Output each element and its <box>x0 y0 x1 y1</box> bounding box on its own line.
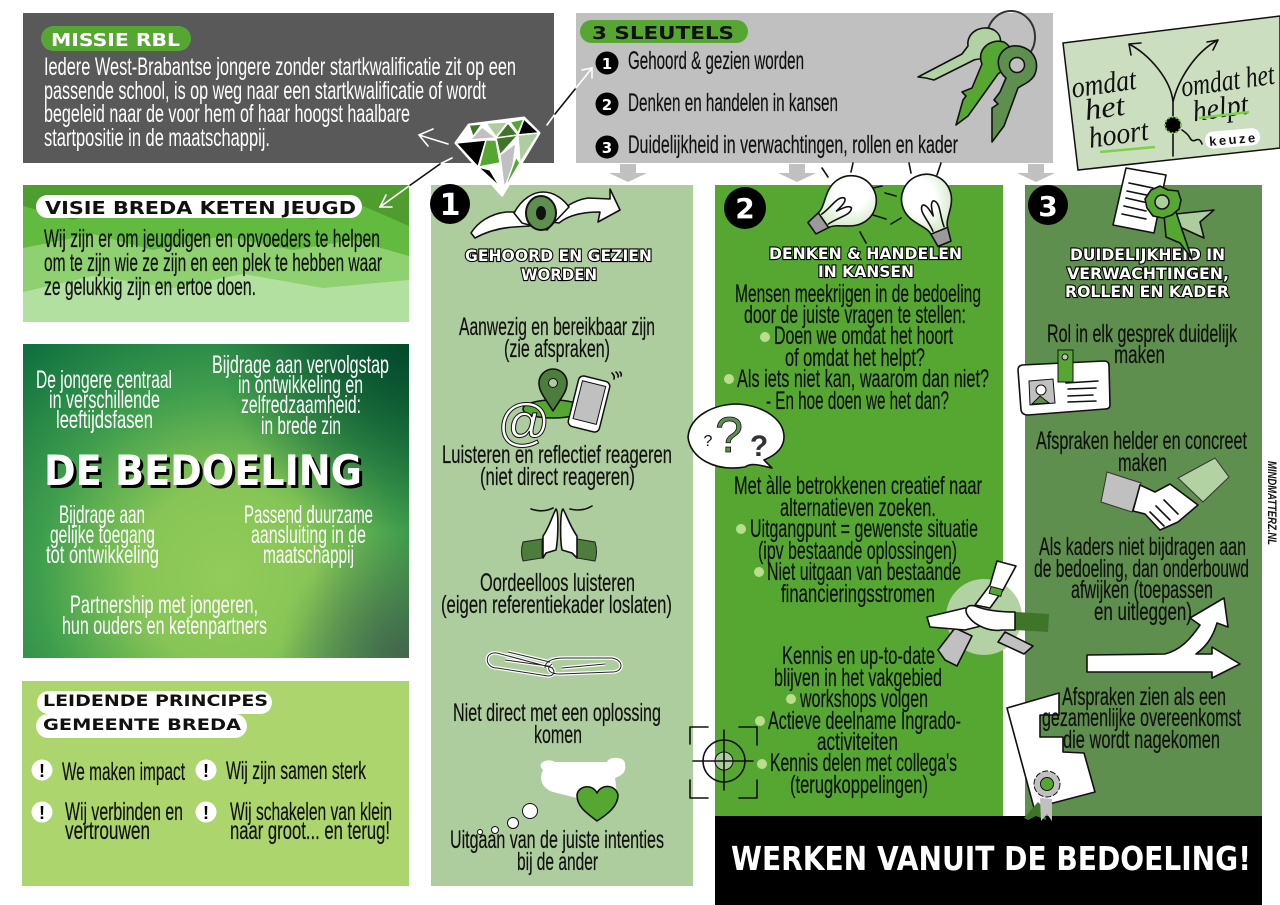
text: passend duurzame: Passend duurzame <box>244 501 373 529</box>
icon: speech bubble with question marks: ? <box>750 430 768 463</box>
text: creatief alternatieven: Niet uitgaan van bestaande <box>767 558 961 586</box>
badge: 1: 1 <box>440 188 460 223</box>
text: kennis up-to-date: workshops volgen <box>799 685 928 713</box>
icon: location, phone, at sign: @ <box>498 394 550 452</box>
heading pill: 3 sleutels: 3 SLEUTELS <box>592 23 734 44</box>
badge: 2 <box>724 187 766 229</box>
text: afspraken helder: maken <box>1118 449 1167 477</box>
panel: 3 sleutels <box>576 11 1053 163</box>
list: sleutels: 3 <box>602 139 612 157</box>
text: niet direct met een oplossing <box>453 699 661 749</box>
text: bijdrage aan vervolgstap: zelfredzaamheid: <box>241 391 361 419</box>
icon: id badge <box>1018 350 1110 415</box>
heading pills: leidende principes <box>36 691 272 738</box>
arrows: grey down arrows <box>609 164 1055 182</box>
text: visie <box>44 225 382 301</box>
icon: target <box>690 727 757 798</box>
badge: 1 <box>430 184 470 224</box>
text: partnership: hun ouders en ketenpartners <box>62 612 267 640</box>
text: de jongere centraal: in verschillende <box>49 386 160 414</box>
text: creatief alternatieven: Met àlle betrokkenen creatief naar <box>734 472 982 500</box>
banner: werken vanuit de bedoeling <box>715 816 1262 905</box>
badge: 3: 3 <box>1038 190 1058 223</box>
icon: certificate <box>1007 693 1095 808</box>
text: aanwezig: Aanwezig en bereikbaar zijn <box>459 313 655 341</box>
heading: duidelijkheid in verwachtingen <box>1065 245 1229 301</box>
text: gelijke toegang <box>46 501 159 569</box>
icon: closed eyes and hands <box>522 506 596 561</box>
text: visie: Wij zijn er om jeugdigen en opvoeders te helpen <box>44 225 380 253</box>
text: visie: ze gelukkig zijn en ertoe doen. <box>44 273 256 301</box>
list: principes: Wij schakelen van klein <box>230 798 392 826</box>
text: oordeelloos: (eigen referentiekader loslaten) <box>441 591 672 619</box>
text: kennis up-to-date <box>755 642 961 799</box>
arrow: diamond to missie <box>419 129 448 146</box>
heading: duidelijkheid in verwachtingen: ROLLEN EN KADER <box>1065 282 1229 301</box>
text: mensen meekrijgen: Doen we omdat het hoort <box>774 322 953 350</box>
text: bijdrage aan vervolgstap: Bijdrage aan vervolgstap <box>212 351 389 379</box>
text: mensen meekrijgen: Als iets niet kan, waarom dan niet? <box>737 365 989 393</box>
credit: mindmatterz.nl: MINDMATTERZ.NL <box>1265 461 1279 545</box>
text: mensen meekrijgen: - En hoe doen we het dan? <box>766 387 949 415</box>
text: gelijke toegang: gelijke toegang <box>50 521 155 549</box>
heading pill: 3 sleutels <box>580 20 748 44</box>
arrow: diamond to sleutels <box>547 68 592 125</box>
text: aanwezig <box>459 313 655 363</box>
heading pill: missie RBL <box>41 26 191 51</box>
text: partnership: Partnership met jongeren, <box>70 591 258 619</box>
text: kennis up-to-date: (terugkoppelingen) <box>790 771 928 799</box>
icon: joined hands <box>927 561 1049 666</box>
illustration card: omdat het hoort of helpt <box>1063 16 1280 170</box>
list: principes: We maken impact <box>62 758 185 786</box>
handwritten text: omdat het helpt <box>1179 58 1280 129</box>
heading: denken en handelen in kansen <box>769 244 962 281</box>
text: afspraken zien <box>1042 683 1241 754</box>
list: principes: Wij verbinden en <box>65 798 183 826</box>
handwritten text: omdat het helpt: helpt <box>1190 88 1251 128</box>
text: juiste intenties: Uitgaan van de juiste intenties <box>450 826 664 854</box>
handwritten text: omdat het hoort: omdat <box>1069 63 1139 105</box>
text: mensen meekrijgen: Mensen meekrijgen in de bedoeling <box>735 280 981 308</box>
heading: duidelijkheid in verwachtingen: DUIDELIJKHEID IN <box>1070 245 1225 264</box>
heading: duidelijkheid in verwachtingen: VERWACHTINGEN, <box>1067 264 1229 283</box>
handwritten text: omdat het hoort: hoort <box>1086 114 1151 155</box>
badge: 2: 2 <box>735 192 755 225</box>
text: missie: Iedere West-Brabantse jongere zonder startkwalificatie zit op een <box>44 53 516 81</box>
heading: denken en handelen in kansen: DENKEN & HANDELEN <box>769 244 962 263</box>
text: gelijke toegang: tot ontwikkeling <box>46 541 159 569</box>
text: juiste intenties <box>450 826 664 876</box>
list: sleutels: Gehoord & gezien worden <box>628 47 804 75</box>
text: mensen meekrijgen: door de juiste vragen te stellen: <box>744 301 966 329</box>
icon: speech bubble with question marks: ? <box>715 407 743 463</box>
text: niet direct met een oplossing: Niet direct met een oplossing <box>453 699 661 727</box>
panel: de bedoeling <box>23 344 409 658</box>
icon: location, phone, at sign <box>498 369 621 452</box>
text: kennis up-to-date: Kennis delen met collega's <box>770 749 957 777</box>
heading: gehoord en gezien worden <box>465 246 652 284</box>
text: missie: begeleid naar de voor hem of haar hoogst haalbare <box>44 100 410 128</box>
heading: de bedoeling: DE BEDOELING <box>44 446 362 495</box>
arrow: diamond to visie <box>380 158 452 207</box>
text: afspraken helder <box>1036 427 1247 477</box>
text: kennis up-to-date: Actieve deelname Ingrado- <box>768 707 961 735</box>
list: principes: ! <box>203 803 209 823</box>
icon: keys <box>918 11 1037 142</box>
text: missie: startpositie in de maatschappij. <box>44 124 270 152</box>
text: bijdrage aan vervolgstap: in brede zin <box>261 412 341 440</box>
handwritten text: omdat het hoort <box>1069 62 1151 156</box>
text: visie: om te zijn wie ze zijn en een plek te hebben waar <box>44 249 382 277</box>
heading: denken en handelen in kansen: IN KANSEN <box>818 262 914 281</box>
text: als kaders <box>1034 533 1249 626</box>
text: aanwezig: (zie afspraken) <box>504 335 610 363</box>
icon: paperclips <box>487 652 621 676</box>
text: creatief alternatieven: alternatieven zoeken. <box>780 494 936 522</box>
list: sleutels: 1 <box>602 55 612 73</box>
text: partnership <box>62 591 267 640</box>
label: keuze: keuze <box>1209 130 1256 149</box>
text: oordeelloos <box>441 569 672 619</box>
icon: handshake <box>1101 458 1229 530</box>
text: creatief alternatieven <box>734 472 982 608</box>
icon: branching arrow <box>1087 598 1240 678</box>
text: bijdrage aan vervolgstap <box>212 351 389 440</box>
text: bijdrage aan vervolgstap: in ontwikkeling en <box>238 371 363 399</box>
icon: eye with arrows <box>471 189 620 238</box>
text: kennis up-to-date: activiteiten <box>817 728 898 756</box>
text: de jongere centraal <box>36 366 172 434</box>
text: niet direct met een oplossing: komen <box>534 721 582 749</box>
heading: gehoord en gezien worden: GEHOORD EN GEZIEN <box>465 246 652 265</box>
text: creatief alternatieven: Uitgangpunt = gewenste situatie <box>750 515 978 543</box>
panel: leidende principes <box>22 681 409 886</box>
list: principes <box>32 757 392 845</box>
text: creatief alternatieven: (ipv bestaande oplossingen) <box>758 537 957 565</box>
text: passend duurzame: maatschappij <box>263 541 354 569</box>
icon: diamond <box>456 118 539 195</box>
text: mensen meekrijgen: of omdat het helpt? <box>785 344 925 372</box>
panel: missie RBL <box>23 13 554 163</box>
text: passend duurzame <box>244 501 373 569</box>
heading pill: visie: VISIE BREDA KETEN JEUGD <box>45 198 356 219</box>
icon: light bulbs <box>798 163 968 253</box>
text: mensen meekrijgen <box>724 280 989 415</box>
icon: thought cloud with heart <box>478 758 625 834</box>
icon: certificate with rosette <box>1113 168 1214 259</box>
list: principes: Wij zijn samen sterk <box>226 757 366 785</box>
text: luisteren: Luisteren en reflectief reageren <box>442 441 672 469</box>
icon: speech bubble with question marks <box>688 404 784 468</box>
list: sleutels: Denken en handelen in kansen <box>628 89 838 117</box>
icon: speech bubble with question marks: ? <box>704 433 713 450</box>
heading pills: leidende principes: LEIDENDE PRINCIPES <box>43 691 268 710</box>
text: missie <box>44 53 516 152</box>
list: principes: ! <box>39 803 45 823</box>
panel: visie Breda keten jeugd <box>23 185 409 322</box>
heading pill: missie RBL: MISSIE RBL <box>51 30 180 51</box>
list: sleutels <box>596 47 958 159</box>
text: rol in elk gesprek: maken <box>1114 341 1165 369</box>
text: missie: passende school, is op weg naar een startkwalificatie of wordt <box>44 77 486 105</box>
icon: certificate seal <box>1024 771 1060 821</box>
text: de jongere centraal: De jongere centraal <box>36 366 172 394</box>
heading pills: leidende principes: GEMEENTE BREDA <box>43 715 242 734</box>
list: principes: ! <box>203 761 209 781</box>
text: oordeelloos: Oordeelloos luisteren <box>480 569 635 597</box>
heading: gehoord en gezien worden: WORDEN <box>521 265 597 284</box>
badge: 3 <box>1028 185 1068 225</box>
panel: column 2 denken en handelen <box>688 163 1003 816</box>
list: principes: vertrouwen <box>65 817 150 845</box>
text: kennis up-to-date: Kennis en up-to-date <box>782 642 935 670</box>
text: passend duurzame: aansluiting in de <box>251 521 366 549</box>
list: principes: ! <box>39 761 45 781</box>
list: sleutels: Duidelijkheid in verwachtingen, rollen en kader <box>628 131 958 159</box>
text: luisteren: (niet direct reageren) <box>480 463 635 491</box>
panel: column 3 duidelijkheid <box>1007 185 1262 816</box>
handwritten text: omdat het hoort: het <box>1083 89 1127 127</box>
text: luisteren <box>442 441 672 491</box>
panel: column 1 gehoord en gezien <box>430 184 693 886</box>
list: sleutels: 2 <box>602 96 612 114</box>
text: kennis up-to-date: blijven in het vakgebied <box>774 664 942 692</box>
text: gelijke toegang: Bijdrage aan <box>59 501 145 529</box>
text: als kaders: en uitleggen) <box>1094 598 1192 626</box>
list: principes: naar groot... en terug! <box>230 817 390 845</box>
text: rol in elk gesprek <box>1047 320 1237 369</box>
text: creatief alternatieven: financieringsstromen <box>781 580 935 608</box>
text: juiste intenties: bij de ander <box>517 848 598 876</box>
text: de jongere centraal: leeftijdsfasen <box>56 406 153 434</box>
